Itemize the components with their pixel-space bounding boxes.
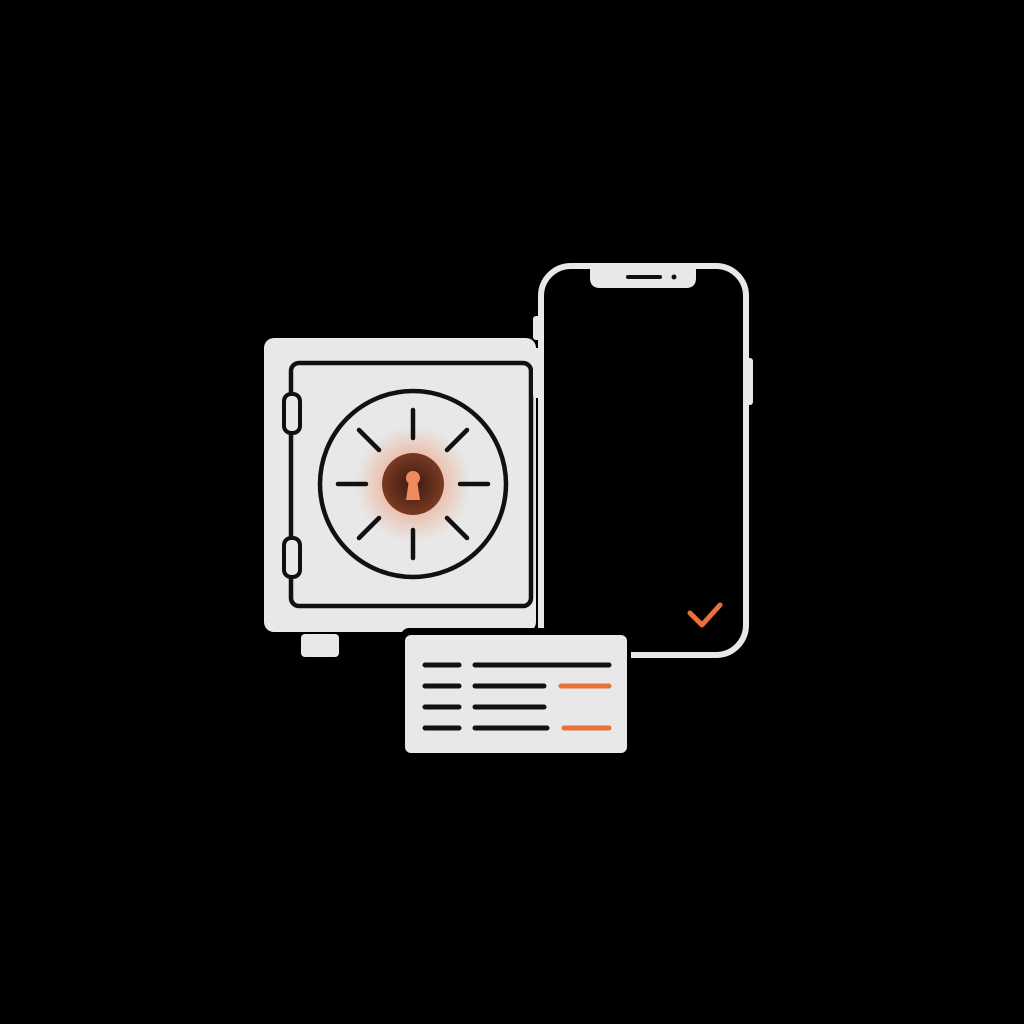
icon: smartphone (533, 266, 753, 655)
icon: checkmark (690, 605, 720, 625)
receipt card (401, 628, 631, 757)
icon: dial with keyhole (320, 391, 506, 577)
icon: safe (264, 338, 536, 657)
